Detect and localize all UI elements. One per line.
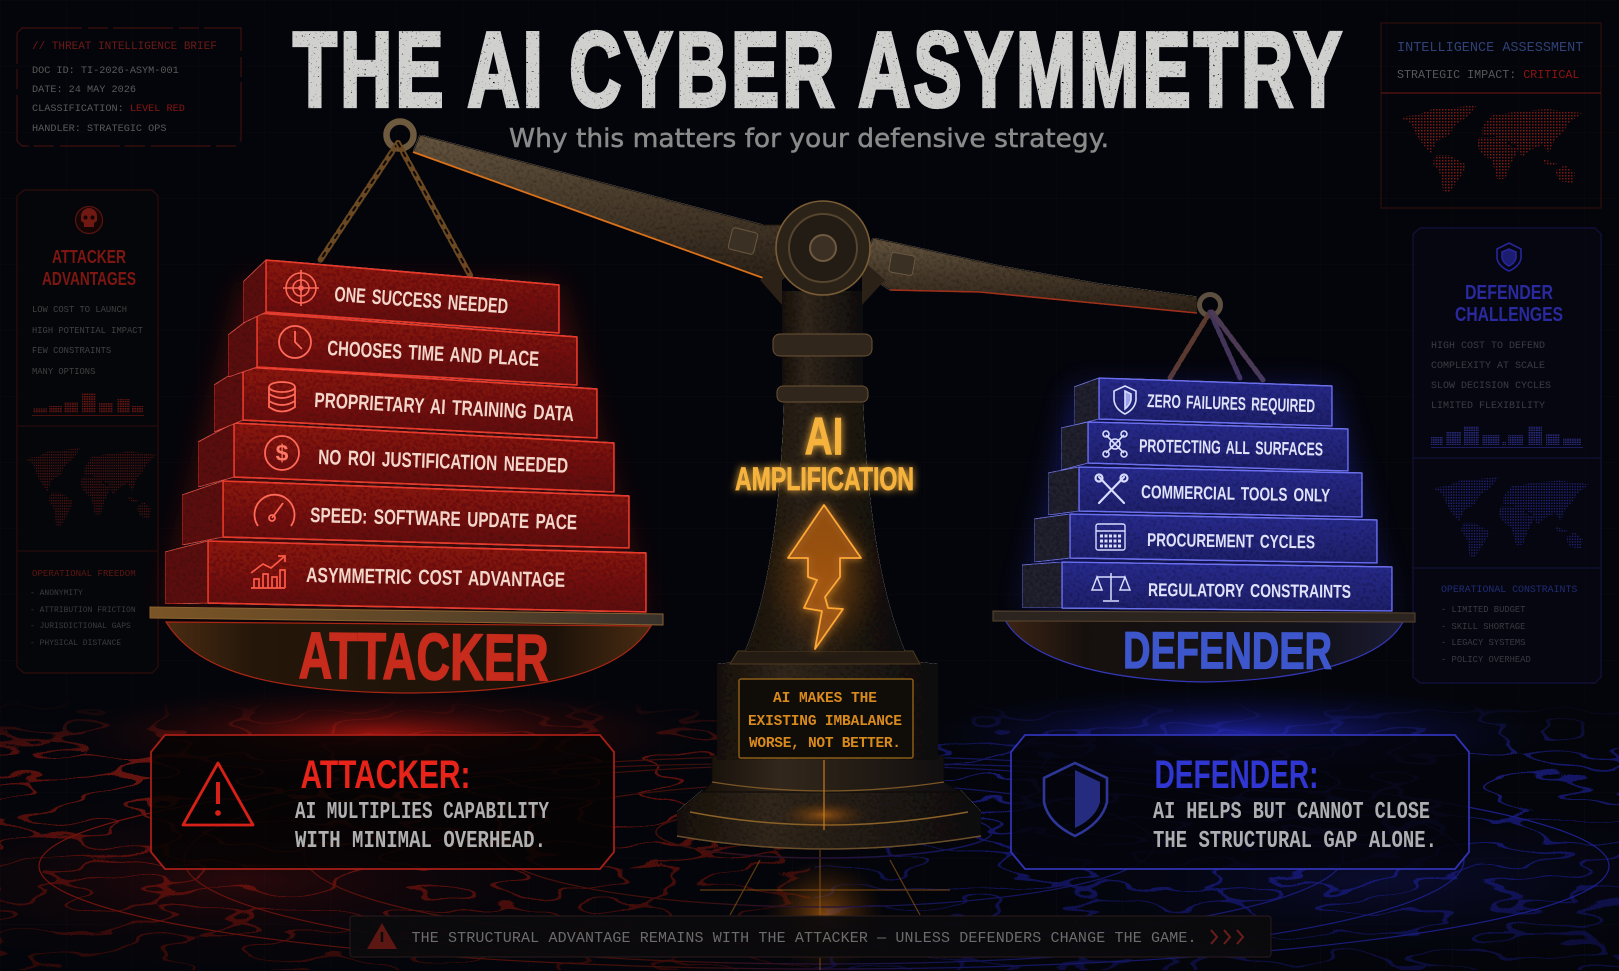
brick labels: CHOOSES TIME AND PLACE [327, 337, 540, 371]
panel: attacker advantages: - ANONYMITY [30, 589, 83, 598]
panel: defender challenges: SLOW DECISION CYCLES [1431, 381, 1551, 392]
icon: warning [367, 923, 397, 949]
icon: wrench and tools [1096, 474, 1128, 503]
icon: shield [1044, 763, 1107, 836]
brick labels [1139, 390, 1351, 602]
brick labels: PROPRIETARY AI TRAINING DATA [314, 389, 575, 426]
label: attacker: ATTACKER [298, 618, 549, 695]
brick labels: COMMERCIAL TOOLS ONLY [1141, 481, 1331, 506]
brick labels: ZERO FAILURES REQUIRED [1147, 390, 1315, 416]
bowl [1005, 620, 1403, 682]
defender pan and weight stack [993, 378, 1415, 682]
panel: intelligence assessment: INTELLIGENCE ASSESSMENT [1397, 41, 1583, 56]
label: AI amplification: AI [804, 408, 844, 466]
brick labels: SPEED: SOFTWARE UPDATE PACE [310, 504, 577, 534]
panel: defender challenges: DEFENDER [1465, 282, 1553, 304]
chains: defender side [1170, 312, 1263, 380]
callout: defender: THE STRUCTURAL GAP ALONE. [1153, 828, 1437, 855]
icon: lightning arrow [788, 505, 861, 649]
central pillar [386, 122, 1220, 858]
panel: defender challenges: LIMITED FLEXIBILITY [1431, 401, 1545, 412]
label: defender: DEFENDER [1123, 622, 1332, 681]
beam [386, 122, 1220, 316]
brick labels: PROTECTING ALL SURFACES [1139, 435, 1323, 460]
icon: database [269, 382, 295, 412]
panel: defender challenges: - SKILL SHORTAGE [1441, 622, 1525, 632]
icon: target [283, 270, 319, 306]
chains: attacker side [319, 143, 470, 275]
chart: defender mini bars [1431, 426, 1583, 448]
icon: warning triangle [183, 763, 253, 825]
panel: attacker advantages: ATTACKER [52, 246, 126, 267]
panel: threat intelligence brief: // THREAT INTELLIGENCE BRIEF [32, 41, 217, 53]
icon: rising chart [251, 556, 285, 588]
panel: defender challenges [1413, 228, 1601, 683]
panel: attacker advantages: ADVANTAGES [42, 268, 136, 289]
attacker pan and weight stack [150, 260, 663, 695]
panel: attacker advantages: FEW CONSTRAINTS [32, 346, 111, 356]
panel: attacker advantages: - JURISDICTIONAL GAPS [30, 622, 131, 631]
icon: skull [76, 206, 102, 234]
panel: threat intelligence brief [17, 28, 241, 146]
panel: attacker advantages: HIGH POTENTIAL IMPACT [32, 326, 143, 336]
panel: defender challenges: CHALLENGES [1455, 304, 1563, 326]
icon: dollar: $ [276, 440, 289, 466]
stepped base [677, 651, 981, 849]
callout: defender: DEFENDER: [1154, 753, 1318, 797]
icon: dollar [265, 436, 299, 470]
panel: threat intelligence brief: DATE: 24 MAY 2026 [32, 85, 136, 96]
callout: attacker [151, 733, 614, 869]
icon: shield [1497, 243, 1521, 271]
plaque: AI makes imbalance worse: EXISTING IMBALANCE [748, 714, 902, 730]
brick labels: PROCUREMENT CYCLES [1147, 529, 1315, 552]
rim [993, 611, 1415, 622]
map: defender world map [1432, 477, 1589, 557]
callout: attacker: AI MULTIPLIES CAPABILITY [295, 799, 549, 826]
rim [150, 607, 663, 625]
brick labels: ASYMMETRIC COST ADVANTAGE [306, 564, 565, 592]
panel: attacker advantages: MANY OPTIONS [32, 367, 95, 377]
bottom banner [350, 916, 1271, 957]
callout: defender: AI HELPS BUT CANNOT CLOSE [1153, 799, 1430, 826]
plaque: AI makes imbalance worse: AI MAKES THE [773, 691, 877, 707]
icon: scales [1092, 573, 1130, 601]
brick labels: REGULATORY CONSTRAINTS [1148, 579, 1351, 602]
icon: calendar [1096, 524, 1125, 550]
panel: attacker advantages [17, 190, 158, 673]
brick labels [306, 283, 577, 592]
label: AI amplification: AMPLIFICATION [735, 461, 914, 497]
panel: threat intelligence brief: CLASSIFICATION: LEVEL RED [32, 104, 185, 115]
brick labels: NO ROI JUSTIFICATION NEEDED [318, 446, 568, 478]
panel: attacker advantages: - PHYSICAL DISTANCE [30, 639, 121, 648]
weight stack bricks [165, 260, 646, 612]
icon: network [1103, 431, 1127, 457]
bottom banner: THE STRUCTURAL ADVANTAGE REMAINS WITH THE ATTACKER — UNLESS DEFENDERS CHANGE THE GAME. [412, 930, 1196, 947]
weight stack bricks [1022, 378, 1392, 611]
panel: intelligence assessment [1381, 23, 1601, 208]
panel: threat intelligence brief: HANDLER: STRATEGIC OPS [32, 124, 166, 135]
bell column [745, 402, 905, 651]
panel: defender challenges: COMPLEXITY AT SCALE [1431, 361, 1545, 372]
plaque: AI makes imbalance worse [739, 679, 913, 758]
panel: defender challenges: - POLICY OVERHEAD [1441, 655, 1531, 665]
plaque: AI makes imbalance worse: WORSE, NOT BETTER. [749, 736, 901, 752]
panel: defender challenges: HIGH COST TO DEFEND [1431, 341, 1545, 352]
panel: defender challenges: - LIMITED BUDGET [1441, 605, 1525, 615]
subtitle: Why this matters for your defensive strategy. [509, 124, 1109, 154]
label: AI amplification [735, 408, 914, 497]
icon: chevrons [1211, 930, 1243, 944]
callout: defender [1011, 733, 1469, 869]
floor glow and circuit rings [0, 685, 1619, 970]
bowl [166, 622, 651, 693]
callout: attacker: WITH MINIMAL OVERHEAD. [295, 828, 546, 855]
panel: defender challenges: - LEGACY SYSTEMS [1441, 638, 1525, 648]
chart: attacker mini bars [32, 393, 144, 416]
icon: clock [279, 326, 311, 358]
panel: attacker advantages: OPERATIONAL FREEDOM [32, 568, 136, 579]
panel: intelligence assessment: STRATEGIC IMPACT: CRITICAL [1397, 68, 1579, 82]
panel: defender challenges: OPERATIONAL CONSTRAINTS [1441, 584, 1577, 595]
brick labels: ONE SUCCESS NEEDED [334, 283, 509, 318]
panel: attacker advantages: - ATTRIBUTION FRICTION [30, 606, 136, 615]
panel: threat intelligence brief: DOC ID: TI-2026-ASYM-001 [32, 66, 179, 77]
icon: gauge [255, 495, 294, 526]
icon: shield check [1114, 386, 1136, 414]
map: attacker world map [24, 448, 156, 526]
map: intelligence world map [1399, 105, 1582, 192]
panel: attacker advantages: LOW COST TO LAUNCH [32, 305, 127, 315]
callout: attacker: ATTACKER: [300, 753, 470, 797]
